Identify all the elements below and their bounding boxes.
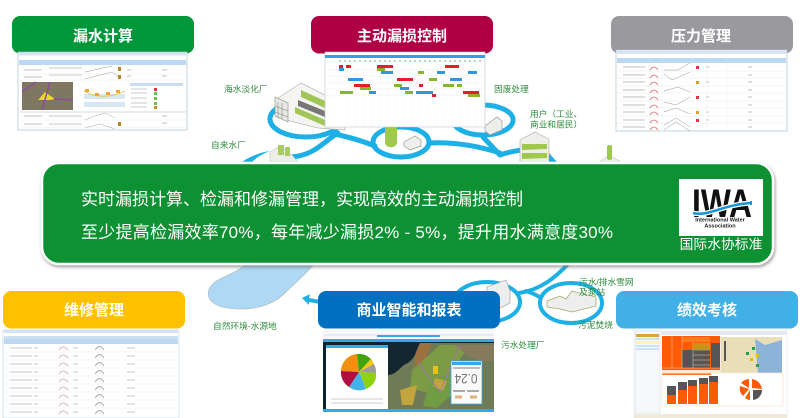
diagram labels [211, 83, 634, 350]
pie chart [740, 379, 762, 400]
sludge incineration plant [547, 291, 596, 312]
panel: maintenance management [3, 291, 185, 418]
heading: pressure management [611, 16, 793, 54]
heading: business intelligence and reports: 商业智能和报表 [356, 301, 462, 319]
screenshot: BI dashboard: 0.24 [454, 371, 478, 387]
heading: leak calculation: 漏水计算 [73, 27, 133, 45]
IWA logo: IWA [692, 182, 752, 226]
heading: maintenance management: 维修管理 [64, 301, 124, 319]
water pipes [270, 101, 602, 323]
main message panel [42, 163, 773, 264]
heading: business intelligence and reports [318, 291, 500, 328]
label: users: 用户（工业、 [530, 108, 582, 119]
waste treatment building [485, 117, 502, 135]
heading: performance assessment [616, 291, 798, 328]
label: sewage network: 及泵站 [579, 286, 605, 297]
pie chart [341, 354, 376, 390]
IWA logo: Association [704, 224, 736, 230]
heading: pressure management: 压力管理 [671, 27, 731, 45]
user buildings [520, 132, 549, 163]
heading: active leakage control [311, 16, 493, 54]
screenshot: distribution network table [18, 52, 187, 130]
heading: leak calculation [12, 16, 194, 54]
panel: active leakage control [311, 16, 493, 127]
water tower [385, 127, 397, 147]
heading: maintenance management [3, 291, 185, 328]
heading: performance assessment: 绩效考核 [677, 301, 737, 319]
screenshot: pressure table [616, 50, 787, 131]
left shoreline water [242, 151, 270, 162]
screenshot: performance dashboard [634, 330, 787, 418]
label: sludge incineration: 污泥焚烧 [578, 319, 613, 330]
label: natural water source: 自然环境-水源地 [213, 320, 277, 331]
label: sewage network: 污水/排水雪网 [579, 276, 634, 287]
label: sewage plant: 污水处理厂 [501, 339, 545, 350]
IWA logo: International Water [695, 218, 746, 224]
screenshot: report table [3, 330, 179, 418]
panel: performance assessment [616, 291, 798, 418]
label: tap water plant: 自来水厂 [211, 139, 246, 150]
screenshot: schedule chart [325, 52, 485, 127]
screenshot: BI dashboard [323, 329, 494, 412]
water works [270, 146, 298, 162]
small building in ring [404, 136, 421, 150]
label: desalination: 海水淡化厂 [224, 83, 268, 94]
blue arrow to water source [302, 294, 320, 305]
label: waste treatment: 固废处理 [494, 83, 529, 94]
message line 1: 实时漏损计算、检漏和修漏管理，实现高效的主动漏损控制 [81, 190, 523, 209]
stacked bar chart [667, 376, 718, 404]
IWA logo [679, 179, 763, 236]
panel: leak calculation [12, 16, 194, 130]
heading: active leakage control: 主动漏损控制 [357, 27, 447, 45]
sewage treatment plant [487, 280, 510, 308]
label: users: 商业和居民） [530, 118, 582, 130]
natural water source lake [208, 262, 316, 309]
panel: business intelligence and reports [318, 291, 500, 412]
water cycle network diagram [208, 83, 623, 323]
distant tower [598, 145, 623, 163]
desalination plant building [275, 83, 345, 130]
panel: pressure management [611, 16, 793, 131]
message line 2: 至少提高检漏效率70%，每年减少漏损2% - 5%，提升用水满意度30% [81, 223, 613, 242]
IWA standard caption: 国际水协标准 [680, 237, 763, 252]
